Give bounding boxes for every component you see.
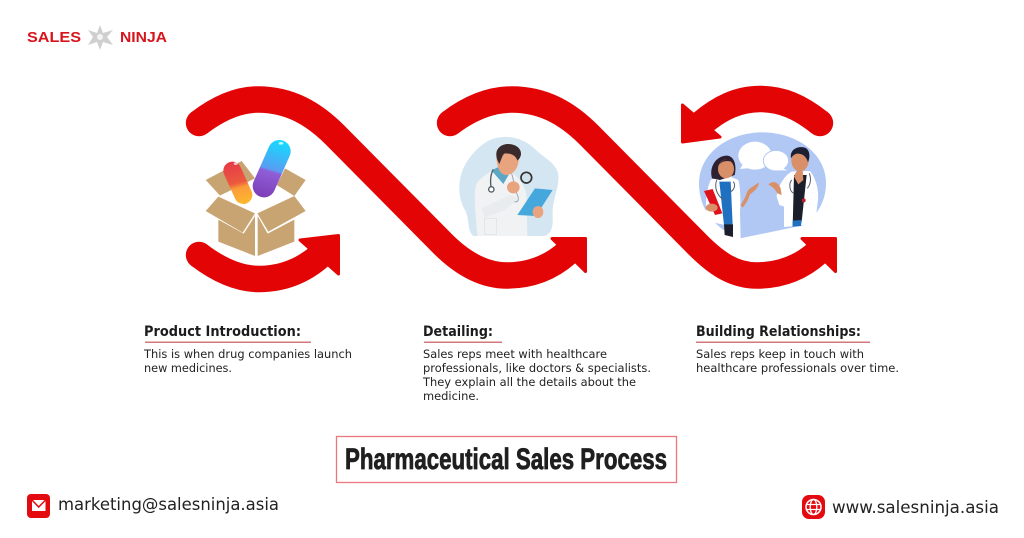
logo bbox=[27, 25, 167, 50]
arrow: first wave from top left to second bottom arrow bbox=[186, 100, 586, 276]
text block: product introduction bbox=[143, 324, 352, 375]
right doctor bbox=[768, 147, 818, 227]
text block: building relationships bbox=[696, 324, 899, 375]
text block: detailing bbox=[422, 324, 651, 403]
arrow: lower left curve bbox=[186, 236, 338, 279]
arrow: upper right return curve bbox=[682, 99, 833, 142]
left doctor bbox=[704, 156, 759, 239]
text block: detailing: Sales reps meet with healthcare bbox=[423, 347, 607, 361]
text block: building relationships: Building Relationships: bbox=[696, 324, 861, 340]
contact: website bbox=[802, 495, 999, 519]
text block: building relationships: Sales reps keep in touch with bbox=[696, 347, 864, 361]
text block: product introduction: new medicines. bbox=[144, 361, 232, 375]
icon: globe bbox=[802, 495, 825, 519]
text block: product introduction: This is when drug companies launch bbox=[143, 347, 352, 361]
contact: email: marketing@salesninja.asia bbox=[58, 495, 279, 514]
title: Pharmaceutical Sales Process bbox=[345, 443, 667, 476]
icon: speech bubbles bbox=[738, 142, 789, 171]
text block: detailing: Detailing: bbox=[423, 324, 493, 340]
contact: website: www.salesninja.asia bbox=[832, 498, 999, 517]
title bbox=[336, 436, 676, 482]
arrow: second wave from top centre to third bottom arrow bbox=[437, 100, 836, 276]
logo: SALES bbox=[27, 29, 81, 46]
text block: building relationships: healthcare professionals over time. bbox=[696, 361, 899, 375]
text block: detailing: medicine. bbox=[423, 389, 479, 403]
icon: open box with capsules bbox=[206, 142, 306, 256]
icon: doctor with clipboard and magnifier bbox=[459, 137, 558, 236]
text block: product introduction: Product Introduction: bbox=[144, 324, 301, 340]
contact: email bbox=[27, 494, 279, 518]
icon: envelope bbox=[27, 494, 50, 518]
icon: two doctors conversing bbox=[699, 132, 826, 239]
text block: detailing: professionals, like doctors & specialists. bbox=[423, 361, 651, 375]
icon: blue backdrop blob bbox=[459, 137, 558, 236]
icon: blue circle backdrop bbox=[699, 132, 826, 238]
text block: detailing: They explain all the details about the bbox=[422, 375, 636, 389]
logo: NINJA bbox=[120, 29, 167, 46]
